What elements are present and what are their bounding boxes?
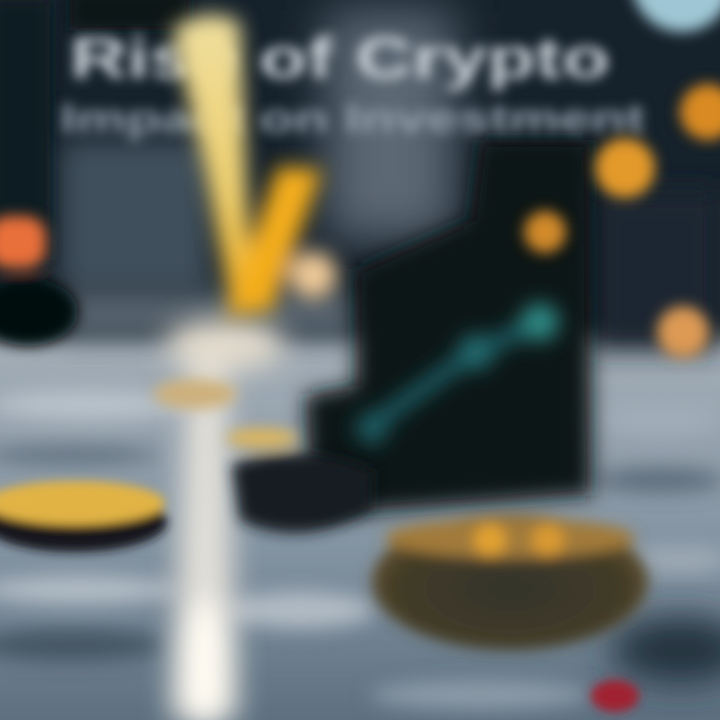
coin: middle dark bbox=[153, 379, 372, 533]
coin: left yellow bbox=[0, 481, 167, 552]
dark tower bbox=[305, 140, 592, 515]
red accent bbox=[591, 680, 639, 712]
title bbox=[60, 26, 645, 141]
light streak bbox=[165, 319, 285, 720]
title: Impact on Investment bbox=[60, 97, 645, 141]
orange coin dots bbox=[524, 84, 720, 358]
floor streaks bbox=[0, 391, 720, 709]
left orange shape and dark blob bbox=[0, 216, 78, 346]
coin: large gold bbox=[372, 514, 648, 650]
bottom right shadow bbox=[610, 616, 720, 684]
teal trend line bbox=[356, 303, 559, 444]
title: Rise of Crypto bbox=[70, 26, 610, 91]
icon: lightning bolt bbox=[172, 15, 337, 316]
icon: top right glow orb bbox=[632, 0, 720, 32]
